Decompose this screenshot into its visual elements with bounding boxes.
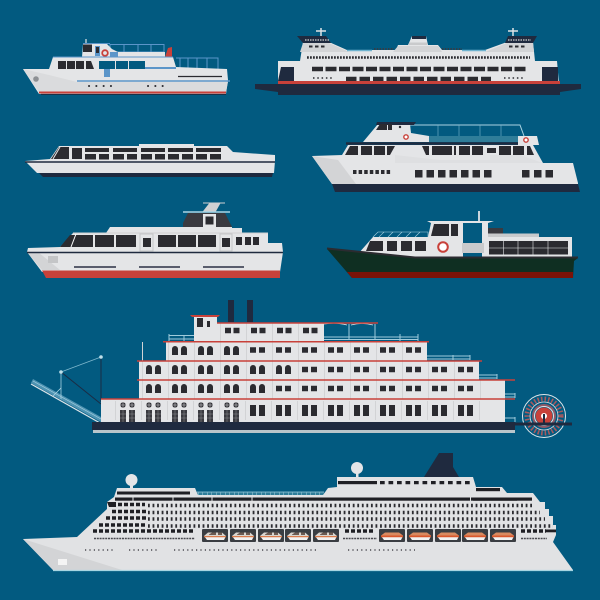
top cabin xyxy=(363,124,539,145)
ship: small white cruiser xyxy=(23,39,230,94)
tower caps xyxy=(297,36,537,43)
red keel xyxy=(42,270,280,278)
dark red keel xyxy=(347,272,573,278)
mast xyxy=(478,211,480,222)
masts xyxy=(316,28,518,37)
funnels xyxy=(228,300,253,322)
bow suites xyxy=(99,504,147,525)
sheer line xyxy=(327,248,578,258)
red band xyxy=(278,81,560,84)
windows xyxy=(58,61,176,77)
bridge xyxy=(183,213,232,227)
hull lines and portholes xyxy=(33,76,230,94)
ship: white yacht with red hull xyxy=(27,203,283,278)
green hull xyxy=(327,249,578,278)
pilot house xyxy=(190,315,220,342)
decks xyxy=(101,323,505,422)
ship: cruise liner xyxy=(23,453,573,570)
red deck edges xyxy=(101,323,515,399)
hull xyxy=(23,57,228,94)
cabin xyxy=(25,144,275,161)
gangway ramp xyxy=(31,379,101,423)
main deck doors xyxy=(120,402,239,422)
keel xyxy=(39,173,273,177)
cabin window rows xyxy=(148,506,553,526)
mast xyxy=(203,203,225,212)
life ring xyxy=(438,242,448,252)
canopy arches xyxy=(324,323,373,325)
deck railings xyxy=(169,324,515,422)
sun deck rail xyxy=(197,492,324,496)
paddle wheel xyxy=(515,394,572,438)
ship: large white yacht xyxy=(312,122,580,192)
funnel xyxy=(408,36,428,45)
windows xyxy=(345,146,553,178)
hull xyxy=(25,161,275,173)
hull xyxy=(312,145,578,184)
windows and doors xyxy=(60,234,259,251)
upper cabin xyxy=(82,39,172,57)
glass canopy xyxy=(410,125,524,142)
rear railing xyxy=(176,58,218,69)
deck 3 windows xyxy=(146,365,473,374)
hull xyxy=(27,252,283,272)
windows xyxy=(366,224,568,254)
upper black strips xyxy=(107,481,532,507)
emblem xyxy=(48,256,58,263)
deck 5 windows xyxy=(225,328,319,333)
hull xyxy=(23,477,573,570)
crane rigging xyxy=(53,355,103,404)
keel xyxy=(332,184,580,192)
bay posts xyxy=(115,332,505,410)
deck 2 windows xyxy=(146,384,473,393)
open section xyxy=(463,223,482,243)
main deck windows xyxy=(250,405,473,416)
ship: long low tour boat xyxy=(25,144,275,177)
end doors xyxy=(278,67,558,81)
hull stripes xyxy=(74,266,244,268)
ship: paddle steamer xyxy=(31,300,572,438)
windows xyxy=(51,147,221,160)
superstructure xyxy=(27,227,283,252)
radar domes xyxy=(126,462,363,489)
funnel xyxy=(424,453,459,477)
hull xyxy=(92,422,515,430)
hull xyxy=(255,84,581,95)
roof rail xyxy=(373,232,428,237)
superstructure xyxy=(278,42,559,84)
window rows xyxy=(307,58,530,79)
cabin xyxy=(358,221,572,258)
lower dashes and portholes xyxy=(85,538,547,550)
lifeboats xyxy=(202,529,516,542)
rear roof xyxy=(488,228,503,234)
bow emblem xyxy=(58,559,67,565)
ship: ferry xyxy=(255,28,581,95)
deck 4 windows xyxy=(172,346,421,355)
ship: green-hulled launch xyxy=(327,211,578,278)
